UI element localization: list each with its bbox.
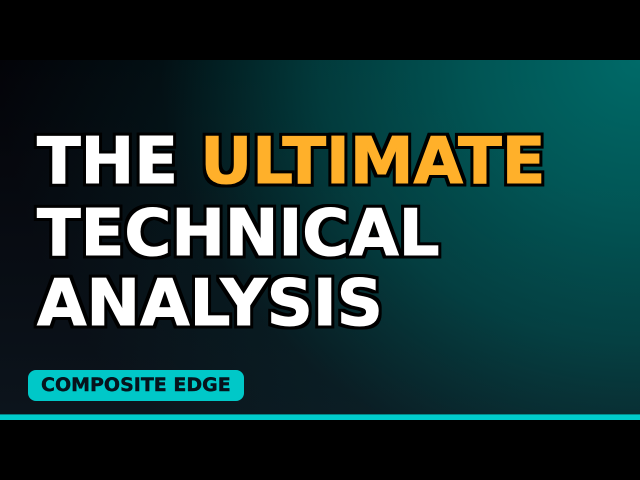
brand badge — [28, 370, 244, 401]
background panel — [0, 60, 640, 415]
title — [37, 125, 545, 341]
title line 3: ANALYSIS — [37, 267, 383, 341]
brand badge: COMPOSITE EDGE — [41, 374, 231, 396]
title line 1: THE ULTIMATE — [37, 125, 545, 199]
title line 2: TECHNICAL — [37, 197, 440, 271]
accent bar — [0, 414, 640, 420]
